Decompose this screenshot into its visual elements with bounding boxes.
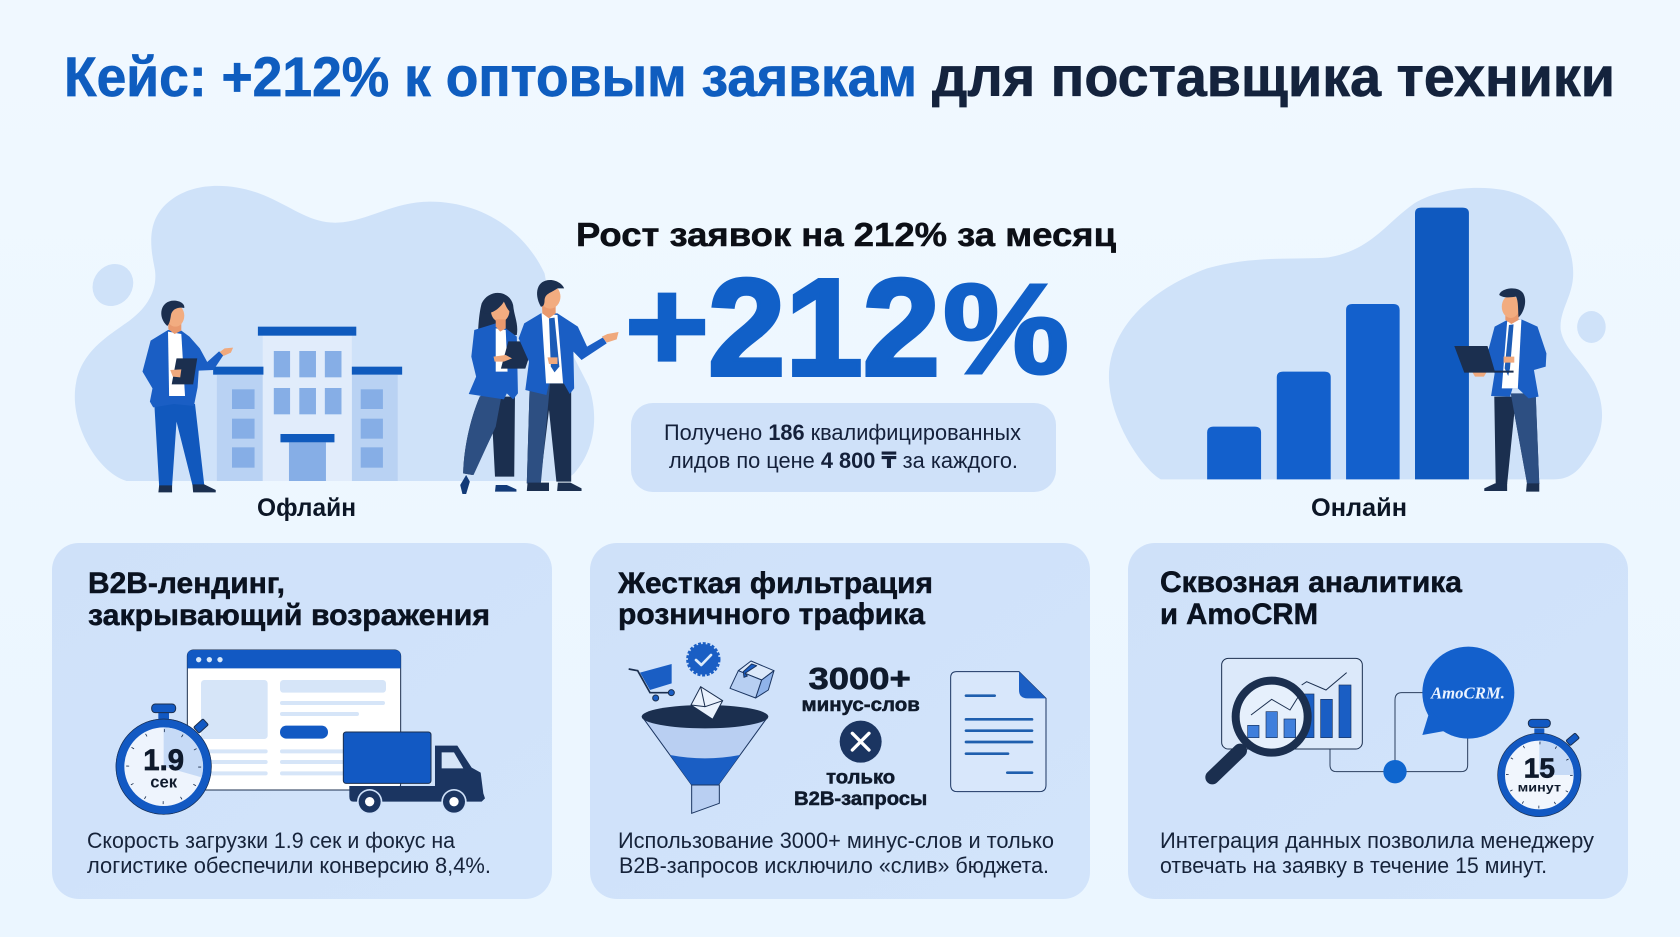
stats text: B2B-запросы [794,789,927,810]
callout: leads: лидов по цене 4 800 ₸ за каждого. [669,448,1018,473]
icon: browser window [187,650,401,790]
callout: leads [631,403,1056,492]
background blob left [75,186,594,481]
card text: отвечать на заявку в течение 15 минут. [1160,853,1547,878]
card text: Использование 3000+ минус-слов и только [618,828,1054,853]
icon: parcel box [730,661,774,698]
card heading: B2B-лендинг, [88,567,285,600]
illustration: browser, stopwatch and truck [116,650,485,814]
person: man with laptop [1454,288,1546,492]
panel: filtering card [590,543,1090,899]
icon: stopwatch 15 min: 15 [1524,752,1555,783]
small blob [87,259,139,311]
title: для поставщика техники [932,45,1615,108]
card heading [88,567,490,632]
icon: analytics chart with magnifier [1212,658,1362,777]
icon: verified badge [687,643,719,675]
icon: cross [840,721,882,763]
icon: CRM speech bubble: AmoCRM. [1430,683,1505,702]
stats text: 3000+ [808,662,911,696]
icon: stopwatch 1.9 sec: сек [150,773,178,792]
stats text: только [826,767,895,788]
person: man presenting [519,280,619,491]
stats text [794,662,927,810]
card text: B2B-запросов исключило «слив» бюджета. [619,853,1049,878]
callout: leads: Получено 186 квалифицированных [664,420,1021,445]
icon: document [951,672,1046,792]
small blob [1577,311,1606,343]
card text [618,828,1054,878]
icon: office building [213,327,402,481]
person: man with tablet [142,301,233,492]
label: offline: Офлайн [257,494,356,522]
card text: Скорость загрузки 1.9 сек и фокус на [87,828,456,853]
card heading: Сквозная аналитика [1160,566,1462,599]
big number: 212 [708,251,940,405]
connector lines [1330,693,1468,772]
big number: % [943,258,1069,401]
icon: stopwatch 15 min: минут [1518,781,1561,795]
title: Кейс: +212% к оптовым заявкам [64,45,917,108]
card text [1160,828,1594,878]
label: online: Онлайн [1311,494,1407,522]
stats text: минус-слов [801,695,920,716]
card heading [617,567,933,631]
card text: Интеграция данных позволила менеджеру [1160,828,1594,853]
card heading [1160,566,1462,631]
panel: offline illustration [75,186,619,494]
card heading: и AmoCRM [1160,598,1318,631]
icon: stopwatch 15 min [1498,719,1581,817]
title [64,45,1615,108]
illustration: funnel, stats and document [629,643,1046,813]
icon: funnel [642,687,768,813]
node dot [1383,760,1407,783]
card heading: закрывающий возражения [88,599,490,632]
card heading: розничного трафика [618,598,925,631]
card text: логистике обеспечили конверсию 8,4%. [87,853,491,878]
background blob right [1109,188,1602,479]
panel: analytics card [1128,543,1628,899]
panel: online illustration [1109,188,1606,492]
icon: stopwatch 1.9 sec [116,704,211,814]
panel: landing card [52,543,552,899]
icon: stopwatch 1.9 sec: 1.9 [143,744,184,777]
icon: shopping cart [629,664,674,701]
icon: truck [343,732,485,814]
card heading: Жесткая фильтрация [617,567,933,600]
heading: growth: Рост заявок на 212% за месяц [576,216,1116,253]
illustration: analytics, CRM and stopwatch [1212,647,1581,817]
bar chart [1207,208,1469,479]
card text [87,828,491,878]
big number [624,251,1069,405]
icon: CRM speech bubble [1422,647,1514,739]
person: woman with tablet [460,293,534,494]
big number: + [624,252,710,399]
